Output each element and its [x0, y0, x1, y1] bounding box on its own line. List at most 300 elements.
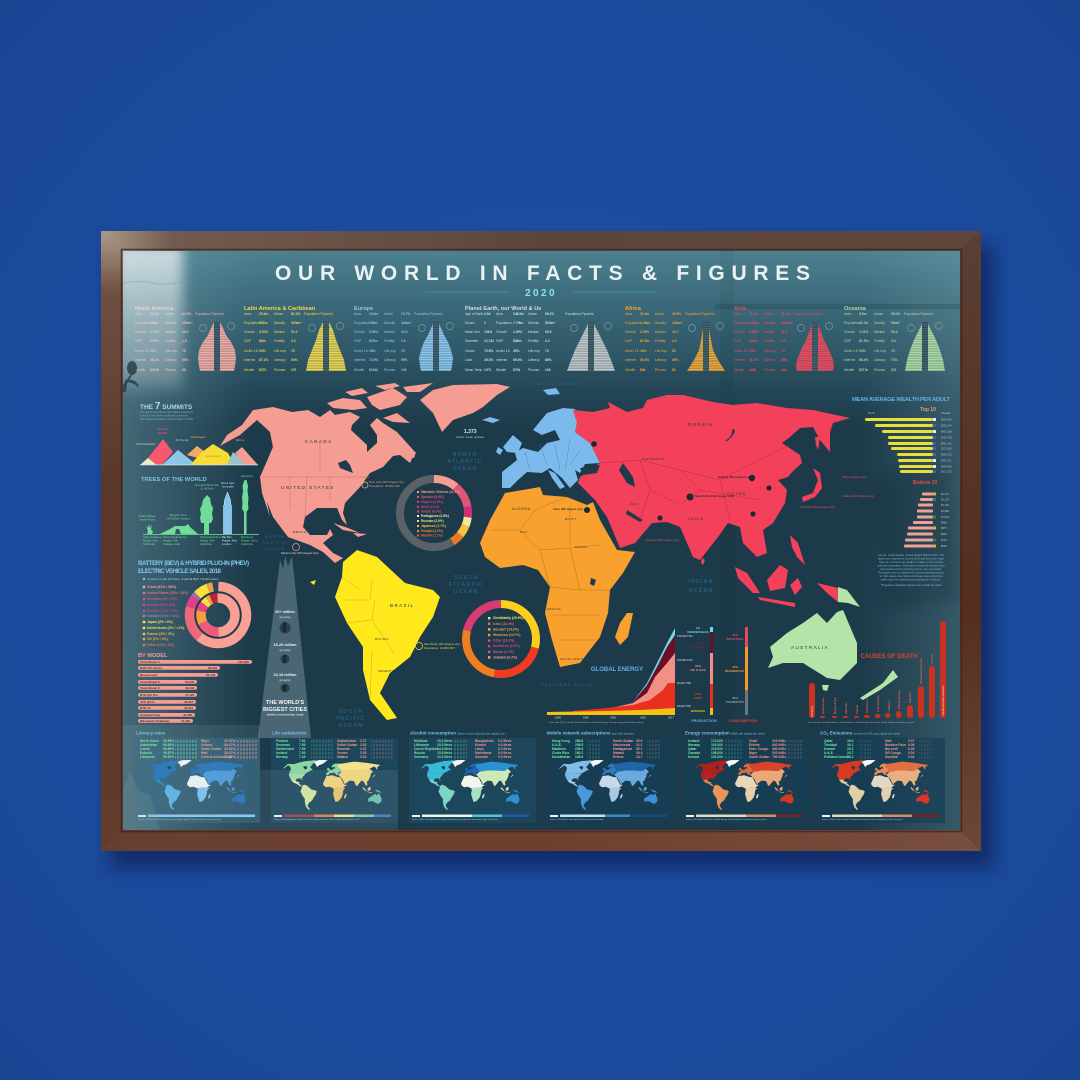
panel: the world's biggest cities: BIGGEST CITIES	[263, 707, 307, 713]
panel: Oceania stats: 1.31%	[859, 330, 868, 334]
panel: CO2 emissions: U.A.E.	[824, 751, 834, 755]
callouts: largest cities: Beijing (8th largest city)	[718, 475, 752, 479]
panel: the 7 summits: Mt Denali	[176, 438, 189, 442]
panel: Planet Earth stats: 148.9m	[513, 312, 524, 316]
callouts: largest cities: Sao Paulo (4th largest city)	[424, 642, 460, 646]
panel: alcohol consumption: 0.0 litres	[498, 747, 512, 751]
panel: Asia stats	[734, 306, 823, 372]
panel: sales by model: Tesla Model X	[140, 686, 160, 690]
panel: Planet Earth stats: Median	[528, 330, 539, 334]
panel: North America stats: 24.7m	[150, 312, 159, 316]
map labels: countries: CHINA	[727, 491, 746, 496]
chart: energy consumption bar: TRANSPORT	[726, 700, 744, 704]
reflection: lower left glare	[123, 725, 398, 830]
panel: Europe stats: 99%	[401, 358, 408, 362]
panel: North America stats: Population Pyramid	[195, 312, 224, 316]
panel: the 7 summits: Aconcagua	[205, 454, 221, 458]
panel: North America stats: Area	[135, 312, 142, 316]
panel: Africa stats: Area	[625, 312, 632, 316]
panel: the world's biggest cities: 20+ million	[275, 610, 296, 614]
panel: Planet Earth stats: Urban	[528, 312, 537, 316]
panel: mobile network subscriptions: Costa Rica	[552, 751, 569, 755]
panel: Oceania stats: 2.4	[891, 339, 896, 343]
panel: sales by model: BAIC EU-Series	[140, 666, 163, 670]
map labels: countries: UNITED STATES	[281, 485, 335, 490]
text block: wealth note: value of a citizen's net wealth in relation to the country	[879, 560, 944, 564]
panel: alcohol consumption: 0.0 litres	[498, 743, 512, 747]
donut: world religions: Buddhism (6.6%)	[493, 644, 520, 648]
panel: Oceania stats: 24%	[859, 349, 866, 353]
panel: sales by model: BYD Qin Pro	[140, 693, 158, 697]
chart: causes of death: Liver disease	[876, 695, 880, 712]
icon: megacity 15-20	[280, 654, 290, 664]
panel: CO2 emissions: (tonnes of CO₂ per capita per year)	[853, 732, 900, 736]
chart: energy consumption bar: RESIDENTIAL	[725, 669, 745, 673]
panel: Europe stats	[354, 306, 443, 372]
panel: Oceania stats: Growth	[844, 330, 855, 334]
panel: mobile network subscriptions: Madagascar	[613, 747, 633, 751]
panel: CO2 emissions: Emissions	[828, 730, 853, 736]
donut: most spoken languages: Mandarin Chinese (11.9%)	[421, 490, 460, 494]
panel: trees of the world: Redwood	[241, 535, 253, 539]
panel: the 7 summits	[136, 401, 258, 465]
panel: energy consumption: South Sudan	[749, 755, 769, 759]
panel: Asia stats: 85%	[781, 358, 788, 362]
panel: Latin America stats: Density	[274, 321, 285, 325]
map labels: oceans: ATLANTIC	[447, 459, 483, 465]
poster background	[123, 251, 960, 830]
mini map: life satisfaction	[283, 760, 382, 810]
panel: Africa stats: $6k	[640, 368, 646, 372]
panel: energy consumption: Norway	[688, 743, 700, 747]
panel: mean average wealth per adult: $989	[941, 520, 947, 524]
panel: literacy rates: 30.47%	[224, 743, 235, 747]
heading: electric vehicle sales: Country of sale (% share of global BEV / PHEV sales)	[147, 577, 219, 581]
panel: the 7 summits: Kilimanjaro	[191, 435, 206, 439]
panel: Asia stats: Fertility	[764, 339, 775, 343]
panel: CO2 emissions: Somalia	[885, 755, 898, 759]
panel: Oceania stats: Median	[874, 330, 885, 334]
panel: Asia stats: Median	[764, 330, 775, 334]
panel: Oceania stats: 71%	[891, 358, 898, 362]
panel: mean average wealth per adult: $830	[941, 532, 947, 536]
panel: Europe stats: 748m	[369, 321, 378, 325]
panel: trees of the world: (1,487m³)	[200, 486, 214, 490]
panel: CO2 emissions: Falkland Islands	[824, 755, 850, 759]
panel: Oceania stats: 110	[891, 368, 896, 372]
panel: trees of the world: Height: 24m	[163, 538, 179, 542]
reflection: plant silhouette	[123, 361, 139, 392]
panel: Asia stats: 31.9	[781, 330, 788, 334]
panel: mobile network subscriptions: South Sudan	[613, 739, 633, 743]
continent: Asia	[573, 395, 850, 607]
panel: Africa stats: Population Pyramid	[685, 312, 714, 316]
panel: alcohol consumption: 0.0 litres	[498, 739, 512, 743]
panel: Oceania stats: Under 15	[844, 349, 858, 353]
panel: North America stats: Growth	[135, 330, 146, 334]
map labels: oceans: ATLANTIC	[448, 582, 484, 588]
panel: trees of the world	[138, 474, 259, 546]
panel: North America stats: 1.8	[182, 339, 187, 343]
panel: Oceania stats: 42.7m	[859, 321, 868, 325]
panel: Planet Earth stats: 2.4	[545, 339, 550, 343]
panel: life satisfaction: 7.81	[299, 739, 306, 743]
panel: alcohol consumption: 13.4 litres	[437, 755, 452, 759]
panel: sales by model: Mitsubishi Outlander	[140, 719, 171, 723]
panel: Latin America stats: Life exp.	[274, 349, 287, 353]
panel: Latin America stats	[244, 306, 333, 372]
panel: Latin America stats: 31.0	[291, 330, 298, 334]
chart: global energy: GLOBAL ENERGY	[591, 667, 643, 673]
panel: Africa stats: Phones	[655, 368, 667, 372]
panel: mobile network subscriptions: 180.2	[575, 751, 583, 755]
map labels: oceans: INDIAN	[688, 579, 714, 585]
panel: North America stats: 79	[182, 349, 186, 353]
panel: CO2 emissions: 0.05	[908, 747, 915, 751]
mini map: mobile	[559, 760, 658, 810]
panel: Asia stats: 23%	[749, 349, 756, 353]
panel: Planet Earth stats: Planet Earth, our World & Us	[465, 306, 541, 312]
chart: causes of death: Cardiovascular diseases	[941, 685, 945, 716]
donut: world religions: Christianity (29.9%)	[493, 616, 524, 620]
panel: energy consumption: 116,000	[711, 743, 723, 747]
panel: Asia stats: GDP	[734, 339, 742, 343]
panel: mobile network subscriptions: 146.6	[575, 755, 583, 759]
panel: alcohol consumption: 15.0 litres	[437, 743, 452, 747]
panel: Europe stats: 34/km²	[401, 321, 412, 325]
legend: EV countries: Other (<1% / 3%)	[147, 643, 174, 647]
panel: alcohol consumption: Lithuania	[414, 743, 429, 747]
panel: mobile network subscriptions: 208.5	[575, 743, 583, 747]
panel: Africa stats: 40%	[640, 349, 647, 353]
map labels: countries: ARGENTINA	[378, 669, 398, 673]
panel: mean average wealth per adult: $1,033	[941, 515, 949, 519]
chart: causes of death: Cancers	[930, 653, 934, 664]
panel: mean average wealth per adult: Rank	[868, 411, 876, 415]
panel: Oceania stats: Population Pyramid	[904, 312, 933, 316]
panel: literacy rates: 34.52%	[224, 747, 235, 751]
panel: CO2 emissions: 49.0	[847, 739, 854, 743]
panel: Oceania stats: GDP	[844, 339, 852, 343]
panel: Latin America stats: GDP	[244, 339, 252, 343]
panel: Africa stats: Population	[625, 321, 641, 325]
panel: Latin America stats: Urban	[274, 312, 283, 316]
panel: Oceania stats: Phones	[874, 368, 886, 372]
mini map: literacy	[147, 760, 246, 810]
panel: Europe stats: 42.5	[401, 330, 408, 334]
callouts: largest cities: Population: 18,804,000	[369, 484, 400, 488]
panel: trees of the world: TREES OF THE WORLD	[141, 477, 207, 483]
text block: wealth note: rather than the material living standards of citizens.	[881, 578, 942, 582]
callouts: largest cities: New Delhi (2nd largest city)	[695, 494, 734, 498]
panel: North America stats: 82.6%	[182, 312, 191, 316]
donut: world religions: Hinduism (14.7%)	[493, 633, 520, 637]
icon: big ben tower	[224, 492, 232, 534]
map labels: oceans: PACIFIC	[263, 540, 287, 545]
chart: global energy: 1850	[583, 716, 589, 720]
panel: CO2 emissions: Burkina Faso	[885, 743, 906, 747]
map labels: oceans: OCEAN	[454, 589, 478, 595]
panel: mean average wealth per adult: $372,692	[941, 446, 952, 450]
panel: Africa stats: Wealth	[625, 368, 635, 372]
panel: energy consumption: 700 kWh	[772, 755, 785, 759]
donut: most spoken languages: Russian (2.0%)	[421, 519, 444, 523]
panel: Europe stats: 16%	[369, 349, 376, 353]
legend: EV countries	[143, 585, 188, 647]
panel: Asia stats: Literacy	[764, 358, 776, 362]
panel: Latin America stats: 2.0	[291, 339, 296, 343]
panel: life satisfaction: Life satisfaction	[272, 730, 307, 736]
panel: North America stats: 98	[182, 368, 186, 372]
panel: Planet Earth stats: 149.6	[484, 330, 492, 334]
chart: global energy: Data: Smil (2017) and BP Statistical Review of World Energy. Primary energy substitution method.	[549, 721, 644, 724]
chart: energy consumption bar: CONSUMPTION	[729, 719, 757, 723]
panel: mean average wealth per adult: $411,060	[941, 442, 952, 446]
panel: mobile network subscriptions: 286.8	[575, 739, 583, 743]
panel: North America stats: Wealth	[135, 368, 145, 372]
panel: trees of the world: Banyan Tree	[169, 513, 187, 517]
map labels: countries: KAZAKHSTAN	[642, 457, 664, 461]
panel: mean average wealth per adult: Bottom 10	[913, 480, 937, 486]
continent: Europe	[482, 388, 600, 489]
panel: mean average wealth per adult: $432,365	[941, 430, 952, 434]
panel: Europe stats: Europe	[354, 306, 373, 312]
panel: Europe stats: 79	[401, 349, 405, 353]
panel: the 7 summits: The seven summits are the highest mountains	[140, 410, 194, 414]
panel: Africa stats: 19.7	[672, 330, 679, 334]
panel: Planet Earth stats: Density	[528, 321, 539, 325]
panel: Asia stats: 51.8%	[749, 358, 758, 362]
continent: North America	[220, 383, 510, 563]
donut: most spoken languages: Marathi (1.1%)	[421, 534, 443, 538]
chart: causes of death: Kidney disease	[897, 690, 901, 709]
panel: Latin America stats: Growth	[244, 330, 255, 334]
panel: the 7 summits: THE 7 SUMMITS	[140, 401, 193, 412]
panel: Planet Earth stats: Diameter	[465, 339, 479, 343]
panel: mobile network subscriptions: 30.1	[636, 747, 643, 751]
panel: Oceania stats: Internet	[844, 358, 855, 362]
panel: Africa stats: Africa	[625, 306, 642, 312]
panel: mobile network subscriptions: Hong Kong	[552, 739, 570, 743]
panel: mean average wealth per adult: $603	[941, 544, 947, 548]
donut: most spoken languages: Hindi (4.4%)	[421, 505, 439, 509]
text block: wealth note: and adult population. Estimates include the financial and	[877, 564, 945, 568]
panel: Latin America stats: Fertility	[274, 339, 285, 343]
panel: Asia stats: $38k	[749, 368, 757, 372]
panel: Africa stats	[625, 306, 714, 372]
panel: sales by model: 46,251	[184, 706, 194, 710]
panel: Asia stats: Asia	[734, 306, 747, 312]
callouts: largest cities: Tokyo (largest city)	[842, 475, 867, 479]
panel: Oceania stats: Wealth	[844, 368, 854, 372]
panel: Latin America stats: 32/km²	[291, 321, 302, 325]
donut: most spoken languages: Punjabi (1.2%)	[421, 529, 443, 533]
panel: alcohol consumption: 15.2 litres	[437, 739, 452, 743]
chart: energy production bar: OIL & GAS	[690, 668, 706, 672]
panel: Asia stats: 51.1%	[781, 312, 790, 316]
panel: Planet Earth stats: 4.54	[484, 312, 491, 316]
map labels: countries: SUDAN	[575, 545, 587, 549]
panel: Europe stats: Population Pyramid	[414, 312, 443, 316]
donut: world religions	[466, 604, 536, 674]
text block: wealth note	[877, 553, 945, 587]
panel: CO2 emissions: Mali	[885, 739, 891, 743]
panel: energy consumption: 174,000	[711, 739, 723, 743]
panel: Europe stats: Under 15	[354, 349, 368, 353]
panel: trees of the world: Hyperion	[241, 474, 253, 478]
legend: EV countries: Netherlands (2% / <1%)	[147, 626, 184, 630]
panel: Asia stats: Population Pyramid	[794, 312, 823, 316]
panel: the 7 summits: Mt Kosciuszko	[136, 442, 156, 446]
panel: Oceania stats: $1.7tn	[859, 339, 869, 343]
panel: mobile network subscriptions: Micronesia	[613, 743, 630, 747]
panel: Europe stats: Wealth	[354, 368, 364, 372]
panel: literacy rates: 35.47%	[224, 751, 235, 755]
panel: Africa stats: 44/km²	[672, 321, 683, 325]
panel: Africa stats: 4.4	[672, 339, 677, 343]
panel: mean average wealth per adult	[852, 397, 952, 587]
panel: Planet Earth stats: Internet	[496, 358, 507, 362]
panel: mobile network subscriptions: Eritrea	[613, 755, 624, 759]
panel: Europe stats: $22tn	[369, 339, 378, 343]
legend: EV countries: United States (18% / 18%)	[147, 591, 188, 595]
map labels: countries: SOUTH AFRICA	[560, 657, 585, 661]
panel: Asia stats: 108	[781, 368, 787, 372]
chart: global energy: 50,000 TWh	[677, 681, 692, 685]
panel: North America stats: North America	[135, 306, 174, 312]
map labels: oceans: SOUTH	[339, 709, 363, 715]
panel: energy consumption: Chad	[749, 739, 757, 743]
text block: wealth note: *Population-weighted global mean wealth per adult	[881, 583, 942, 587]
panel: Latin America stats: 94%	[291, 358, 298, 362]
legend: EV countries: Germany (3% / 5%)	[147, 597, 178, 601]
panel: sales by model	[138, 653, 252, 723]
icon: megacity 10-15	[280, 684, 290, 692]
panel: sales by model: JAC iEV E	[140, 700, 155, 704]
panel: life satisfaction: Iceland	[276, 751, 287, 755]
panel: Europe stats: Population	[354, 321, 370, 325]
panel: Planet Earth stats: Area	[496, 312, 503, 316]
population pyramid: Europe	[418, 322, 454, 371]
panel: Oceania stats: Area	[844, 312, 851, 316]
chart: global energy	[547, 628, 693, 724]
chart: global energy: 100,000 TWh	[677, 658, 693, 662]
panel: North America stats	[135, 306, 224, 372]
panel: sales by model: 41,000	[181, 719, 191, 723]
panel: CO2 emissions: 0.04	[908, 751, 915, 755]
panel: mean average wealth per adult: $1,270	[941, 492, 949, 496]
chart: global energy: 1950	[640, 716, 646, 720]
panel: Africa stats: $2.6tn	[640, 339, 650, 343]
panel: Planet Earth stats: 14°C	[484, 368, 492, 372]
continent: South America	[310, 550, 440, 720]
panel: North America stats: 95%	[182, 358, 189, 362]
panel: mean average wealth per adult: $364,022	[941, 452, 952, 456]
chart: energy production bar: 27%	[695, 692, 701, 696]
panel: Latin America stats: Population Pyramid	[304, 312, 333, 316]
panel: Europe stats: 23.0m	[369, 312, 378, 316]
panel: Latin America stats: Area	[244, 312, 251, 316]
panel: Europe stats: GDP	[354, 339, 362, 343]
chart: causes of death: Homicide	[844, 702, 848, 714]
panel: Asia stats: Density	[764, 321, 775, 325]
panel: trees of the world: Not a tree:	[221, 481, 235, 485]
panel: Africa stats: Median	[655, 330, 666, 334]
chart: energy production bar: NUCLEAR	[691, 645, 706, 649]
chart: causes of death: Diabetes	[887, 700, 891, 711]
panel: Asia stats: Phones	[764, 368, 776, 372]
panel: the world's biggest cities: (within metropolitan area)	[267, 712, 303, 716]
panel: Planet Earth stats: 12,742	[484, 339, 494, 343]
callouts: largest cities: Shanghai (3rd largest city)	[800, 505, 835, 509]
panel: CO2 emissions: DR Congo	[885, 751, 901, 755]
panel: alcohol consumption: Mauritania	[475, 751, 492, 755]
map labels: oceans: ARCTIC OCEAN	[533, 381, 579, 386]
panel: Europe stats: 72.9%	[369, 358, 378, 362]
panel: life satisfaction: Switzerland	[276, 747, 294, 751]
panel: Planet Earth stats: 59.6%	[513, 358, 522, 362]
panel: mobile network subscriptions: Kazakhstan	[552, 755, 570, 759]
world map	[220, 381, 898, 729]
panel: trees of the world: California	[241, 542, 253, 546]
panel: life satisfaction: 3.53	[360, 751, 367, 755]
donut: most spoken languages	[400, 479, 468, 547]
population pyramid: North America	[198, 322, 236, 371]
panel: North America stats: 88.1%	[150, 358, 159, 362]
panel: literacy rates: 37.40%	[224, 755, 235, 759]
panel: sales by model: 145,846	[238, 660, 249, 664]
callouts: largest cities: Cairo (9th largest city)	[553, 507, 583, 511]
panel: Planet Earth stats: Fertility	[528, 339, 539, 343]
panel: Oceania stats: 68.4%	[859, 358, 868, 362]
chart: energy consumption bar: 30%	[732, 696, 738, 700]
map labels: countries: IRAN	[630, 502, 638, 506]
panel: Oceania stats: 5/km²	[891, 321, 901, 325]
panel: mobile network subscriptions: Maldives	[552, 747, 566, 751]
chart: energy production bar: 4%	[696, 626, 700, 630]
panel: Latin America stats: 20.1m	[259, 312, 268, 316]
panel: Asia stats: Area	[734, 312, 741, 316]
mini map: alcohol	[421, 760, 520, 810]
panel: life satisfaction: Malawi	[337, 755, 348, 759]
panel: Planet Earth stats: Age of Earth	[465, 312, 483, 316]
panel: the world's biggest cities: 15-20 million	[273, 643, 297, 647]
panel: mean average wealth per adult: $1,130	[941, 503, 949, 507]
panel: North America stats: 0.71%	[150, 330, 159, 334]
panel: North America stats: Phones	[165, 368, 177, 372]
panel: mean average wealth per adult: $416,728	[941, 436, 952, 440]
population pyramid: Oceania	[905, 322, 945, 371]
panel: CO2 emissions: 0.07	[908, 739, 915, 743]
chart: causes of death: Digestive	[908, 691, 912, 703]
callouts: largest cities	[281, 429, 875, 650]
chart: global energy: 1900	[610, 716, 616, 720]
map labels: countries: BRAZIL	[390, 603, 414, 608]
panel: alcohol consumption: 0.0 litres	[498, 751, 512, 755]
chart: causes of death: Malaria & HIV	[833, 697, 837, 714]
callouts: largest cities: 1,373	[464, 429, 477, 435]
map labels: oceans	[263, 381, 714, 729]
panel: alcohol consumption: Kuwait	[475, 743, 487, 747]
legend: EV countries: China (61% / 56%)	[147, 585, 176, 589]
chart: energy production bar: RENEWABLES	[687, 630, 709, 634]
map labels: oceans: NORTH	[265, 534, 285, 539]
panel: Planet Earth stats: 1	[484, 321, 486, 325]
panel: Planet Earth stats: Mean Temp	[465, 368, 482, 372]
panel: trees of the world: Height: 96m	[222, 538, 238, 542]
panel: sales by model: BY MODEL	[138, 653, 168, 659]
chart: energy production bar: PRODUCTION	[691, 719, 717, 723]
